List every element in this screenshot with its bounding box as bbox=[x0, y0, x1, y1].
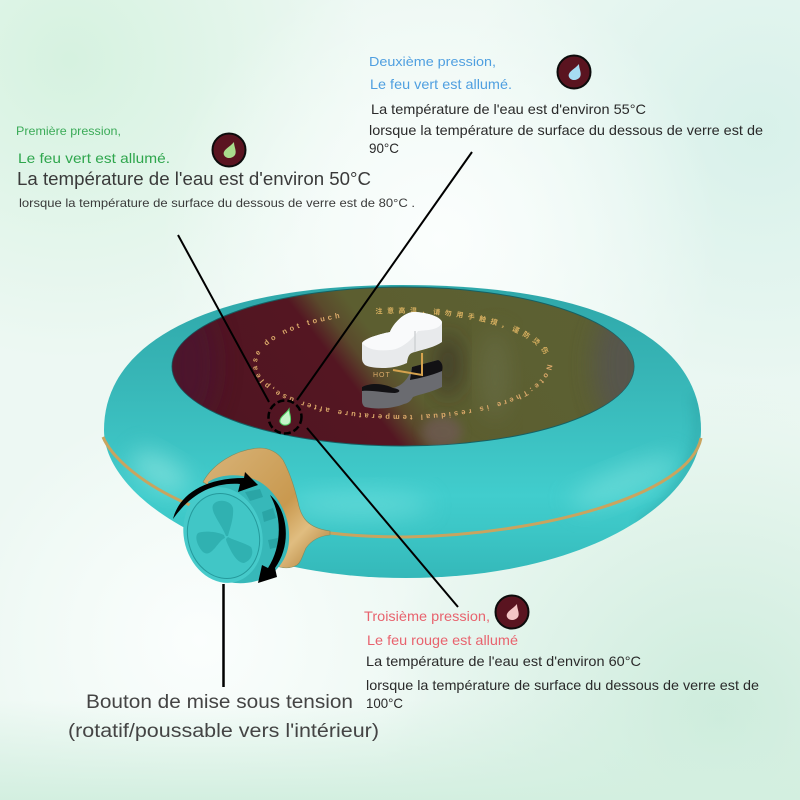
icon: blue drop badge bbox=[558, 56, 590, 88]
knob face bbox=[173, 478, 273, 592]
first press text block bbox=[16, 124, 415, 210]
first press temperature: La température de l'eau est d'environ 50°C bbox=[17, 169, 371, 189]
second press text block: 90°C bbox=[369, 140, 399, 156]
hot label: HOT bbox=[373, 372, 391, 379]
second press temperature: La température de l'eau est d'environ 55°C bbox=[371, 101, 646, 117]
device: heated coaster bbox=[102, 285, 702, 584]
third press detail: lorsque la température de surface du dessous de verre est de bbox=[366, 677, 759, 693]
rotation arrow: top bbox=[173, 472, 258, 519]
second press heading: Deuxième pression, bbox=[369, 54, 496, 69]
power button caption bbox=[68, 692, 379, 742]
circular gold lettering: chinese: 注意高温，请勿用手触摸，谨防烫伤。 bbox=[376, 307, 548, 354]
power button caption: (rotatif/poussable vers l'intérieur) bbox=[68, 721, 379, 742]
gold knob collar bbox=[203, 448, 330, 568]
gold stand bbox=[393, 353, 422, 375]
icon: red drop badge bbox=[496, 596, 528, 628]
third press text block: 100°C bbox=[366, 695, 403, 711]
knob ribs bbox=[245, 489, 278, 549]
second press light: Le feu vert est allumé. bbox=[370, 76, 512, 92]
body shading bbox=[125, 395, 699, 525]
icon: green drop badge bbox=[212, 134, 246, 166]
third press temperature: La température de l'eau est d'environ 60°C bbox=[366, 653, 641, 669]
third press text block bbox=[364, 608, 759, 711]
first press light: Le feu vert est allumé. bbox=[18, 150, 170, 166]
dashed ring with indicator drop bbox=[268, 400, 302, 434]
second press text block bbox=[369, 54, 763, 156]
third press heading: Troisième pression, bbox=[364, 608, 490, 624]
power button caption: Bouton de mise sous tension bbox=[86, 692, 353, 713]
knob side bbox=[208, 475, 289, 583]
mug holder reflection bbox=[362, 360, 443, 408]
rotation arrow: right bbox=[258, 495, 286, 583]
third press light: Le feu rouge est allumé bbox=[367, 632, 518, 648]
gold seam line bbox=[103, 437, 701, 537]
fan icon bbox=[196, 501, 252, 563]
second press detail: lorsque la température de surface du dessous de verre est de bbox=[369, 122, 763, 138]
white mug holder bbox=[362, 312, 442, 368]
power knob bbox=[173, 475, 289, 592]
top glass plate bbox=[162, 287, 650, 448]
first press detail: lorsque la température de surface du dessous de verre est de 80°C . bbox=[19, 196, 415, 210]
device body bbox=[104, 285, 701, 578]
callout lines bbox=[178, 152, 472, 687]
first press heading: Première pression, bbox=[16, 124, 121, 138]
circular gold lettering: latin: Note:There is residual temperature after use,please do not touch bbox=[253, 313, 552, 420]
